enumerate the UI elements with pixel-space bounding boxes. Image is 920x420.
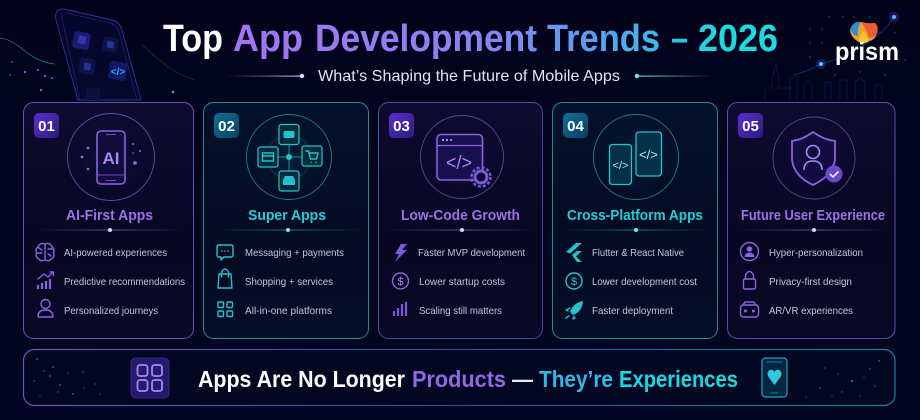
heading: AI-First Apps [66,208,153,224]
icon: AI phone: AI [102,149,120,168]
decorative phone illustration [56,9,141,100]
panel: Super Apps [204,102,368,338]
item: Faster deployment: Faster deployment [592,305,673,317]
divider [562,228,710,232]
title: – [671,18,688,60]
divider [740,228,888,232]
item: Hyper-personalization: Hyper-personalization [769,247,863,259]
badge 04: 04 [567,118,584,135]
title: 2026 [698,18,778,60]
item: Personalized journeys [38,300,158,317]
icon: phone with heart [762,358,787,397]
badge 03: 03 [393,118,410,135]
item: Scaling still matters [394,302,502,317]
closing text: — [512,366,533,392]
item: Personalized journeys: Personalized journeys [64,305,158,317]
decorative dots left [33,358,101,397]
item: AI-powered experiences [36,243,167,261]
badge 02 [214,113,239,138]
closing text: They’re [539,366,613,392]
item: Flutter & React Native [566,243,684,262]
icon: code window: </> [446,153,472,174]
item: Messaging + payments: Messaging + payments [245,247,344,259]
decorative dots right [805,360,880,398]
panel: Future User Experience [728,102,895,338]
closing text: Products [412,366,506,392]
decorative phone illustration: </> [111,67,125,78]
closing text: Apps Are No Longer [198,366,405,392]
item: Hyper-personalization [740,242,863,260]
title [163,18,778,60]
item: Predictive recommendations: Predictive recommendations [64,276,185,288]
title: Development [315,18,537,60]
item: Shopping + services: Shopping + services [245,276,333,288]
divider [388,228,536,232]
item: Predictive recommendations [38,272,185,289]
item: AR/VR experiences: AR/VR experiences [769,305,853,317]
logo: prism [835,22,899,66]
item: Lower startup costs: $ [397,276,404,288]
heading: Low-Code Growth [401,208,520,224]
heading: Cross-Platform Apps [567,208,703,224]
icon: super app hub [246,114,332,200]
divider [37,228,185,232]
item: Faster MVP development: Faster MVP development [418,247,525,259]
item: Flutter & React Native: Flutter & React Native [592,247,684,259]
closing text [198,366,738,392]
panel: Cross-Platform Apps [552,102,718,338]
badge 05: 05 [742,118,759,135]
decorative left network wave [0,38,195,93]
panel: Low-Code Growth [378,102,542,338]
item: All-in-one platforms [218,302,332,317]
item: Privacy-first design [744,272,852,289]
item: Scaling still matters: Scaling still matters [419,305,502,317]
item: Faster deployment [566,301,673,319]
item: Lower development cost: Lower development cost [592,276,697,288]
icon: user shield [773,117,855,199]
subtitle [225,68,717,85]
title: Top [163,18,223,60]
closing text: Experiences [619,366,738,392]
icon: two phones: </> [639,147,658,162]
decorative skyline and dots [765,12,906,100]
logo: prism: prism [835,38,899,66]
icon: code window [420,116,504,198]
badge 01: 01 [38,118,55,135]
badge 05 [738,113,763,138]
icon: AI phone [68,114,154,200]
icon: app grid [131,358,169,398]
icon: two phones [594,114,678,200]
heading: Future User Experience [741,208,885,224]
item: Messaging + payments [217,245,344,260]
item: Lower startup costs: Lower startup costs [419,276,505,288]
item: AI-powered experiences: AI-powered experiences [64,247,167,259]
title: Trends [547,18,660,60]
item: Lower development cost [566,273,697,289]
panel: AI-First Apps [24,102,194,338]
badge 04 [563,113,588,138]
divider [215,228,363,232]
icon: two phones: </> [613,160,628,172]
item: AR/VR experiences [740,302,853,317]
item: All-in-one platforms: All-in-one platforms [245,305,332,317]
heading: Super Apps [248,208,326,224]
item: Faster MVP development [395,244,525,262]
badge 02: 02 [218,118,235,135]
title: App [233,18,303,60]
badge 03 [389,113,414,138]
badge 01 [34,113,59,138]
item: Privacy-first design: Privacy-first design [769,276,852,288]
item: Lower startup costs [392,273,505,289]
subtitle: What’s Shaping the Future of Mobile Apps [318,68,620,85]
item: Shopping + services [218,269,333,288]
item: Lower development cost: $ [571,276,577,288]
banner: closing message [24,350,895,406]
